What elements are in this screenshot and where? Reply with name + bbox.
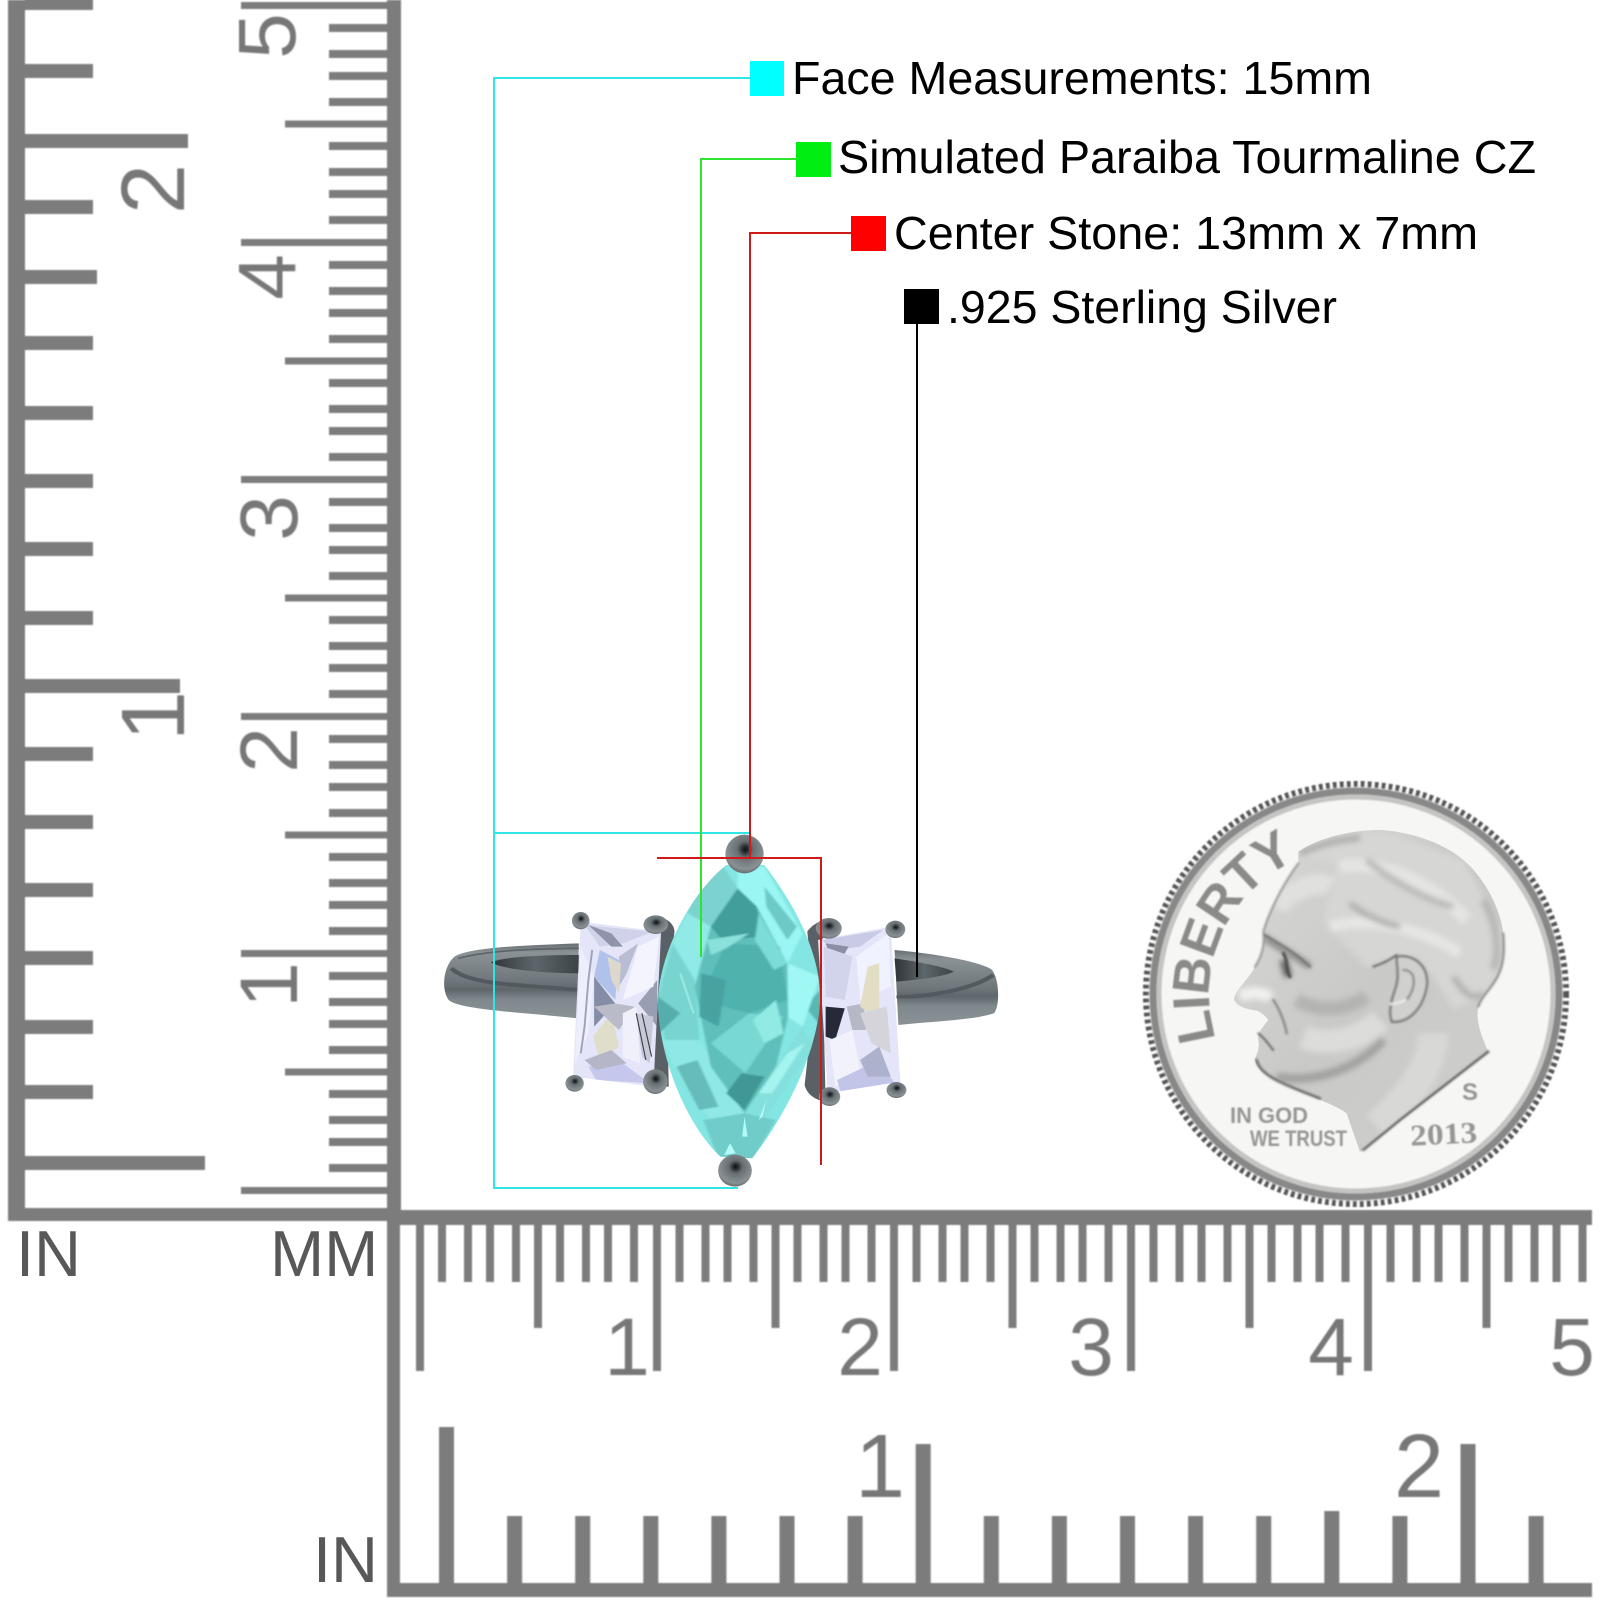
coin lettering: date and mint mark	[1409, 1079, 1478, 1153]
coin lettering: date and mint mark: S	[1462, 1079, 1478, 1106]
coin lettering: IN GOD WE TRUST: WE TRUST	[1250, 1126, 1347, 1151]
inch-scale numbers: left ruler: 1	[104, 691, 204, 741]
unit label: IN bottom ruler: IN	[313, 1523, 378, 1596]
millimetre-scale numbers: left ruler: 3	[224, 495, 315, 541]
ruler frame: left ruler	[8, 0, 401, 1221]
millimetre ticks: left ruler	[241, 6, 387, 1190]
coin rim	[1146, 784, 1566, 1204]
legend: center stone: Center Stone: 13mm x 7mm	[894, 207, 1478, 259]
ruler frame: bottom ruler	[387, 1210, 1592, 1597]
millimetre-scale numbers: bottom ruler: 5	[1549, 1302, 1595, 1393]
coin lettering: date and mint mark: 2013	[1409, 1116, 1478, 1153]
millimetre ticks: bottom ruler	[420, 1225, 1582, 1371]
inch-scale numbers: bottom ruler	[855, 1417, 1444, 1517]
millimetre-scale numbers: left ruler: 5	[222, 13, 313, 59]
inch ticks: left ruler	[25, 3, 205, 1163]
inch-scale numbers: bottom ruler: 1	[855, 1417, 905, 1517]
left vertical ruler	[8, 0, 401, 1221]
ring illustration	[444, 835, 998, 1187]
millimetre-scale numbers: left ruler: 1	[224, 962, 315, 1008]
inch-scale numbers: left ruler	[104, 164, 204, 741]
millimetre-scale numbers: left ruler	[222, 13, 315, 1008]
inch ticks: bottom ruler	[446, 1427, 1536, 1585]
sterling silver leader	[916, 324, 918, 977]
millimetre-scale numbers: bottom ruler: 3	[1068, 1302, 1114, 1393]
millimetre-scale numbers: bottom ruler: 2	[837, 1302, 883, 1393]
millimetre-scale numbers: left ruler: 2	[224, 727, 315, 773]
center stone leader and bracket	[657, 233, 851, 1165]
bottom horizontal ruler	[387, 1210, 1595, 1597]
leader lines	[494, 78, 917, 1188]
setting posts	[650, 916, 835, 1102]
unit label: IN left ruler: IN	[16, 1217, 81, 1290]
coin lettering: IN GOD WE TRUST	[1230, 1103, 1347, 1151]
legend: simulated paraiba tourmaline: Simulated Paraiba Tourmaline CZ	[838, 131, 1536, 183]
face measurement bracket	[494, 78, 750, 1188]
ear	[1390, 956, 1427, 1022]
millimetre-scale numbers: bottom ruler: 4	[1308, 1302, 1354, 1393]
baguette stone: right	[818, 927, 900, 1093]
ring shank: right	[895, 950, 998, 1025]
inch-scale numbers: bottom ruler: 2	[1394, 1417, 1444, 1517]
facial shading	[1240, 884, 1433, 1127]
millimetre-scale numbers: left ruler: 4	[222, 254, 313, 300]
millimetre-scale numbers: bottom ruler: 1	[604, 1302, 650, 1393]
dime coin	[1142, 780, 1570, 1208]
legend: face measurements: Face Measurements: 15mm	[792, 52, 1372, 104]
hair mass	[1298, 830, 1503, 1010]
legend: sterling silver: .925 Sterling Silver	[947, 281, 1337, 333]
coin lettering: IN GOD WE TRUST: IN GOD	[1230, 1103, 1308, 1128]
metal prongs	[565, 835, 906, 1187]
ring shank: left	[444, 943, 579, 1018]
legend	[750, 52, 1536, 333]
portrait profile	[1234, 830, 1504, 1152]
coin lettering: LIBERTY: LIBERTY	[1172, 828, 1285, 1044]
unit label: MM: MM	[270, 1217, 378, 1290]
head edges and features	[1255, 863, 1504, 1150]
inch-scale numbers: left ruler: 2	[104, 164, 204, 214]
paraiba tourmaline leader	[701, 159, 796, 957]
baguette stone: left	[573, 922, 661, 1087]
marquise center stone	[653, 865, 822, 1160]
millimetre-scale numbers: bottom ruler	[604, 1302, 1595, 1393]
